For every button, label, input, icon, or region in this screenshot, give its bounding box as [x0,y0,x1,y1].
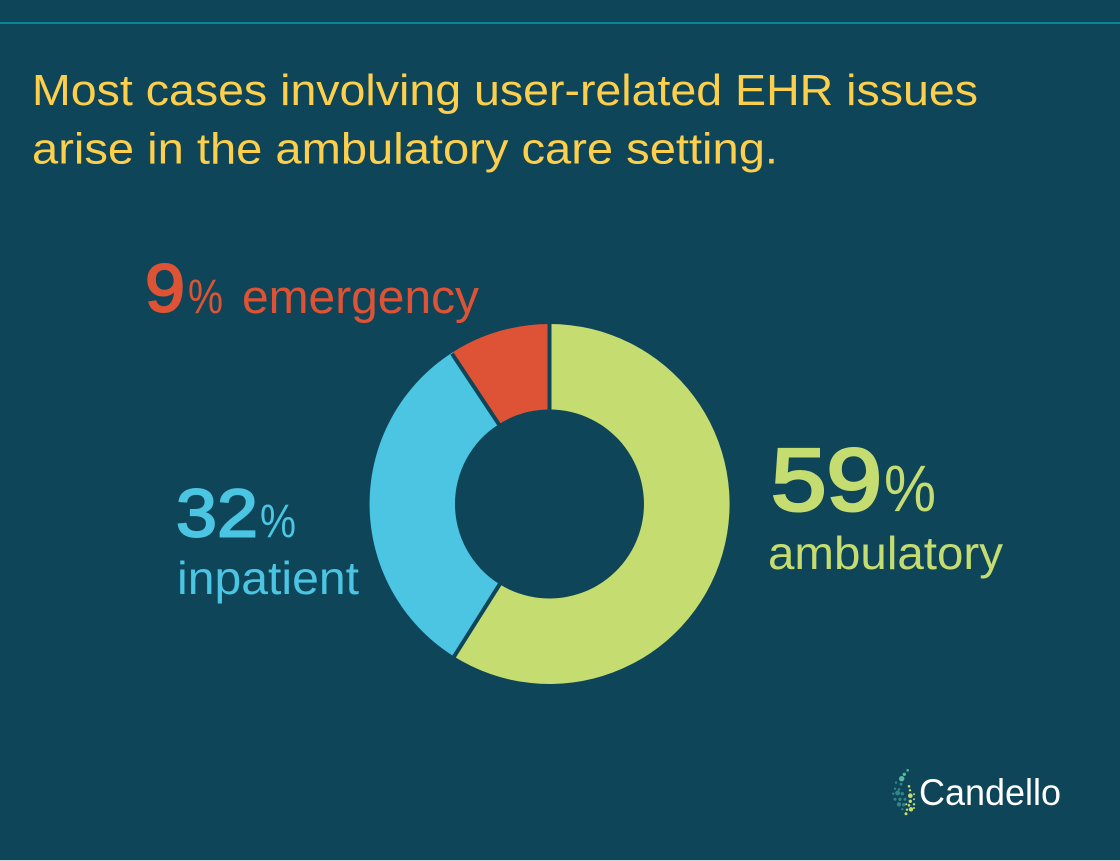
label: ambulatory [768,430,1003,579]
segment: inpatient 32% [370,352,499,656]
label: emergency: emergency [242,270,480,323]
donut chart [370,322,730,684]
label: inpatient [176,476,359,604]
icon: dotted flame [892,769,915,815]
label: inpatient: 32 [176,476,258,552]
label: ambulatory: % [884,451,936,525]
label: ambulatory: ambulatory [768,527,1003,579]
title: arise in the ambulatory care setting. [32,124,778,174]
label: inpatient: % [260,494,296,547]
logo wordmark: Candello [919,772,1061,813]
segment: emergency 9% [453,324,550,424]
label: emergency: 9 [145,250,185,326]
segment: ambulatory 59% [453,324,730,684]
label: emergency: % [188,271,223,324]
logo: Candello [892,769,1061,815]
label: ambulatory: 59 [771,430,882,529]
label: inpatient: inpatient [177,552,359,604]
label: emergency [145,250,480,326]
title [32,66,978,174]
title: Most cases involving user-related EHR issues [32,66,978,115]
